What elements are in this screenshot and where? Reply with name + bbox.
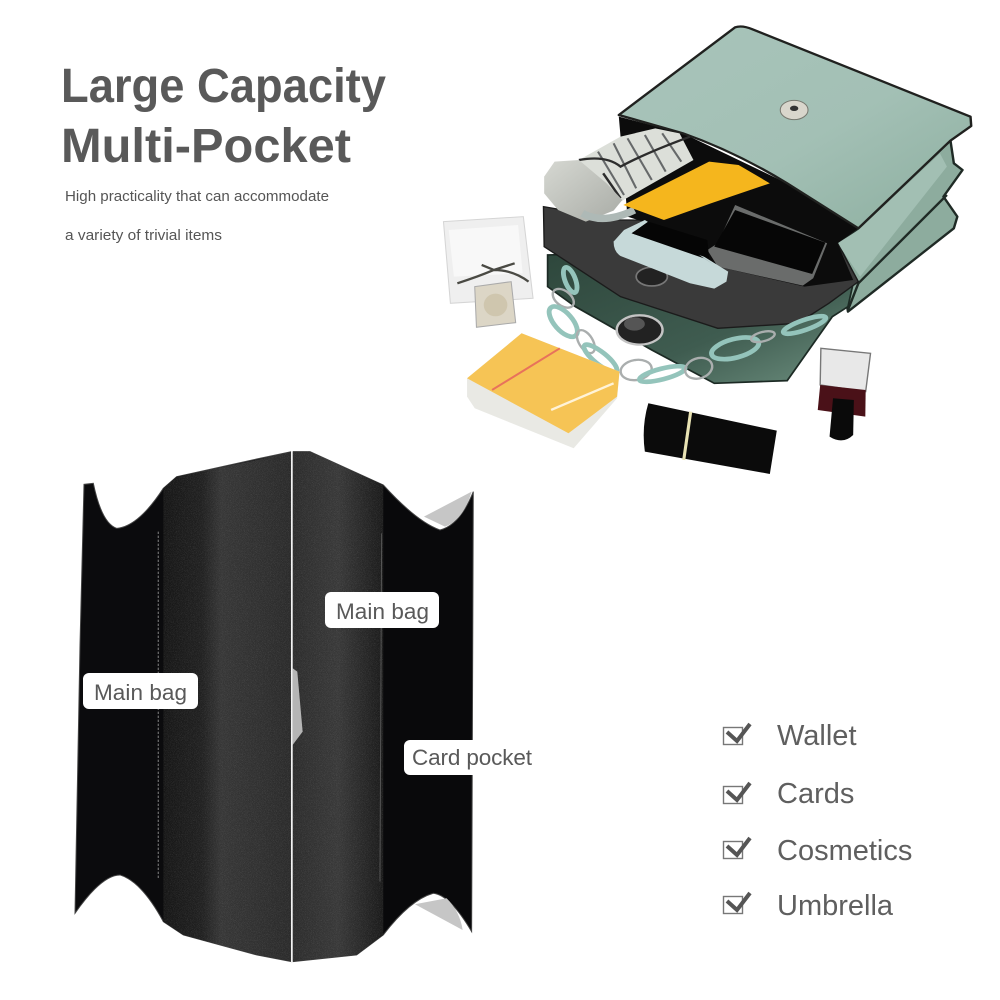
umbrella xyxy=(544,128,693,222)
label: main bag right xyxy=(325,592,439,628)
item: cards xyxy=(724,778,854,810)
label: card pocket xyxy=(404,740,540,775)
label: main bag left xyxy=(83,673,198,709)
right lining xyxy=(293,452,473,962)
lipstick xyxy=(644,403,777,474)
item: umbrella: Umbrella xyxy=(777,890,894,922)
lower front panel xyxy=(548,253,853,383)
checklist xyxy=(724,720,912,922)
interior bag photo xyxy=(75,451,473,962)
central left panel xyxy=(163,452,292,962)
tissue pack xyxy=(467,333,620,448)
bag interior xyxy=(619,117,858,287)
lower snap ring xyxy=(617,315,663,345)
left lining xyxy=(75,452,292,962)
subtitle text xyxy=(65,189,329,244)
perfume bottle xyxy=(443,217,533,327)
item: cards: Cards xyxy=(777,778,854,810)
nail polish xyxy=(818,348,871,440)
subtitle text: High practicality that can accommodate xyxy=(65,189,329,205)
right top pocket edge xyxy=(424,492,472,527)
flap snap button xyxy=(780,100,808,120)
item: cosmetics: Cosmetics xyxy=(777,835,912,867)
front flap xyxy=(619,27,971,228)
left stitching xyxy=(156,532,160,878)
phone two xyxy=(707,205,827,286)
clasp detail xyxy=(293,668,303,745)
product photo: open bag with items xyxy=(443,27,971,474)
label: main bag left: Main bag xyxy=(94,680,187,705)
item: umbrella xyxy=(724,890,894,922)
label: main bag right: Main bag xyxy=(336,599,429,624)
center divider xyxy=(291,451,293,962)
item: wallet xyxy=(724,720,856,752)
chain links xyxy=(544,266,828,385)
inner dark flap xyxy=(543,207,858,328)
title: Multi-Pocket xyxy=(61,120,351,173)
phone one xyxy=(614,220,728,289)
central right panel xyxy=(293,452,383,962)
item: wallet: Wallet xyxy=(777,720,856,752)
bag side gusset xyxy=(838,140,963,312)
inner snap xyxy=(636,267,667,286)
label: card pocket: Card pocket xyxy=(412,745,533,770)
title xyxy=(61,60,386,173)
right stitching xyxy=(380,533,382,882)
title: Large Capacity xyxy=(61,60,386,113)
yellow sachet xyxy=(623,162,770,220)
right bottom pocket edge xyxy=(415,898,463,930)
leather grain xyxy=(163,452,383,962)
subtitle text: a variety of trivial items xyxy=(65,228,222,244)
